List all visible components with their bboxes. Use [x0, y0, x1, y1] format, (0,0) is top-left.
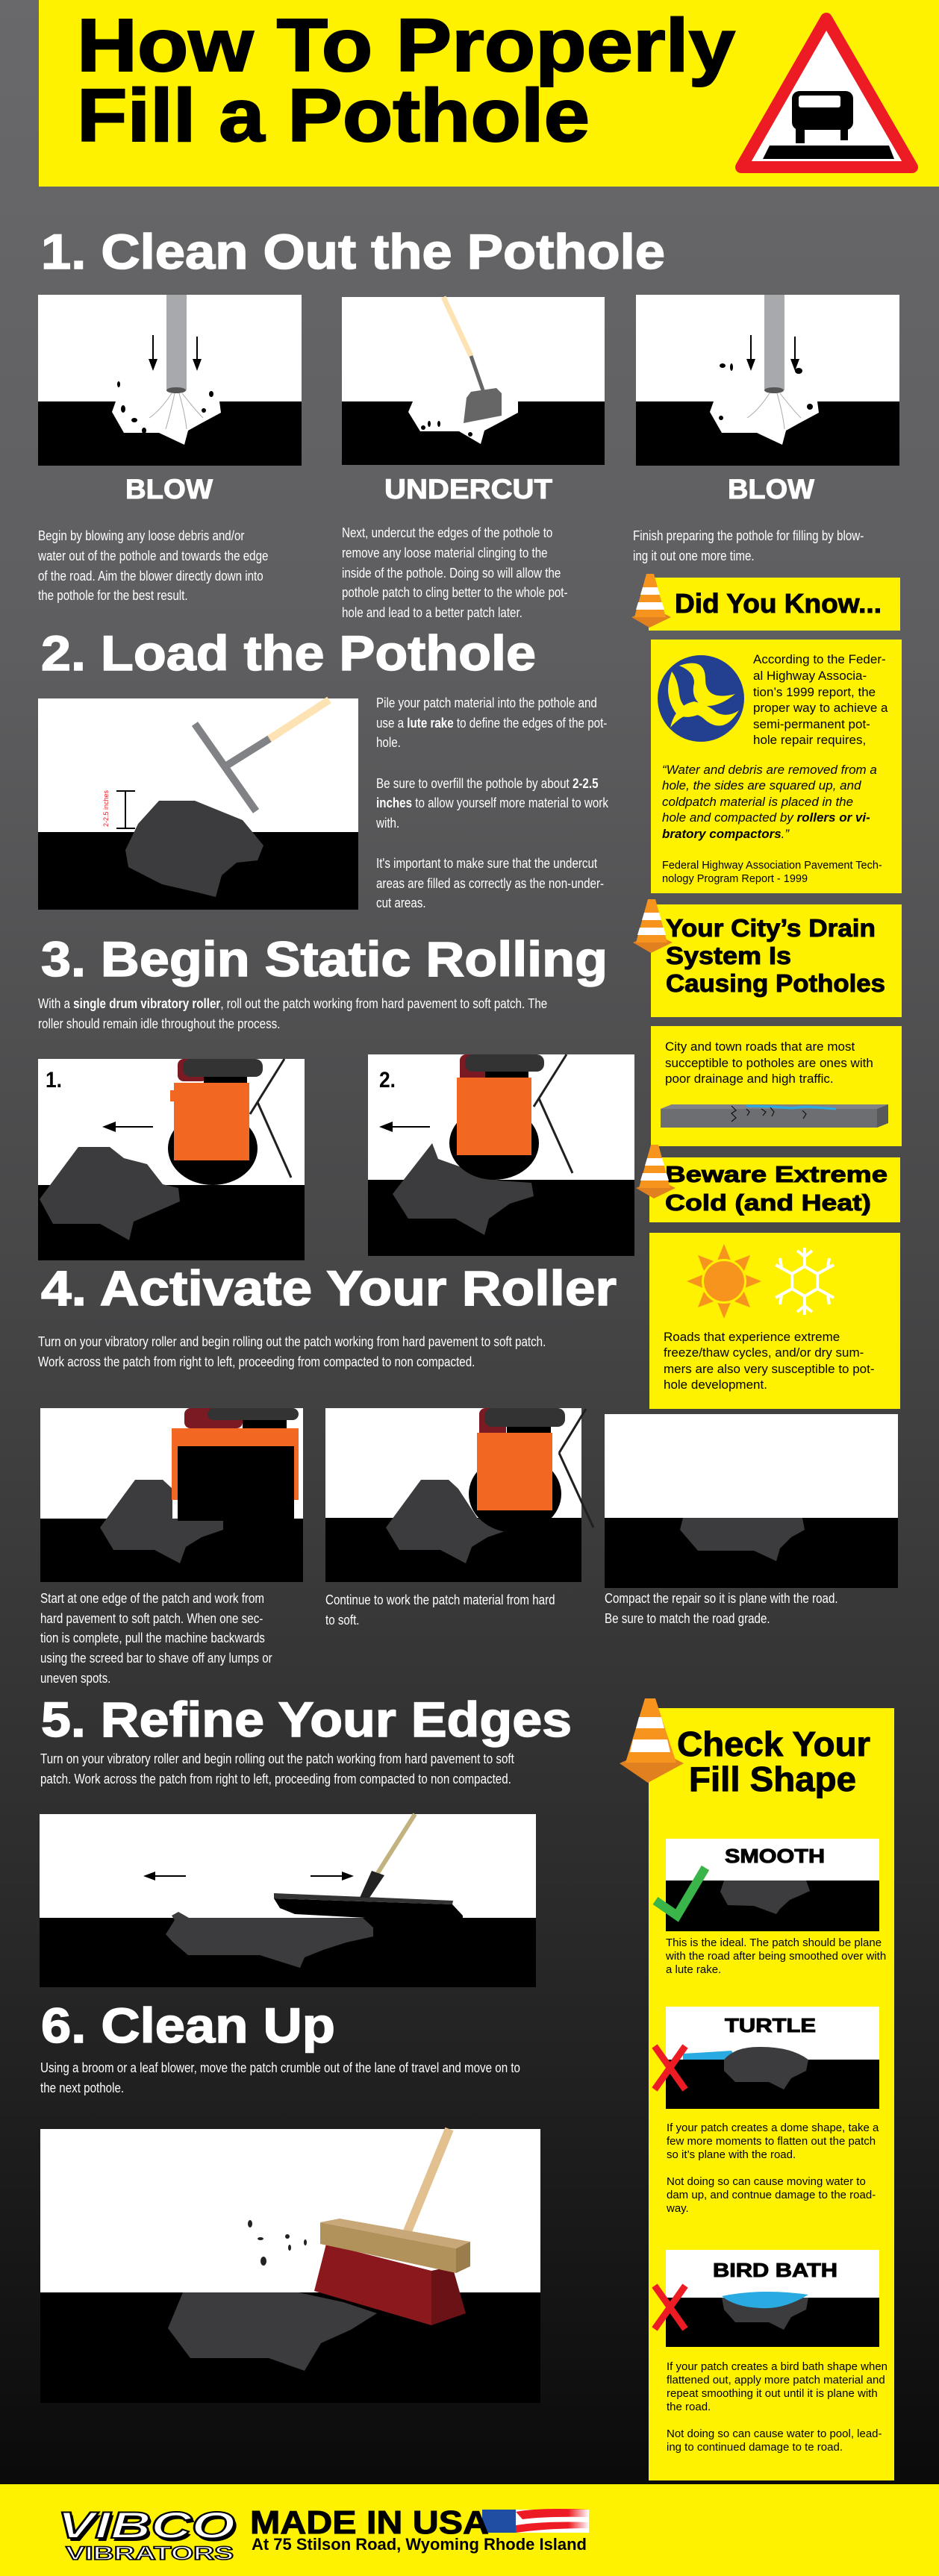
label: BLOW 2: BLOW: [728, 474, 814, 504]
footer: [0, 2484, 939, 2576]
callout: check your fill shape: Not doing so can cause moving water to: [667, 2175, 866, 2188]
callout: did you know: Did You Know...: [675, 588, 882, 619]
callout: check your fill shape: [649, 1708, 894, 2480]
title banner: [39, 0, 939, 187]
callout: check your fill shape: Not doing so can cause water to pool, lead-: [667, 2427, 882, 2440]
text: activate captions: tion is complete, pull the machine backwards: [40, 1631, 265, 1645]
annotation: 2-2.5 inches: 2-2.5 inches: [102, 790, 110, 827]
text: undercut: Next, undercut the edges of the pothole to: [342, 525, 552, 540]
panel: blow 2: [636, 295, 899, 466]
panel: smooth: SMOOTH: [725, 1845, 825, 1867]
text: load: hole.: [376, 735, 401, 750]
heading: 4: 4. Activate Your Roller: [41, 1260, 617, 1316]
callout: check your fill shape: the road.: [667, 2401, 711, 2413]
callout: FHWA: semi-permanent pot-: [753, 717, 870, 731]
text: activate captions: Start at one edge of the patch and work from: [40, 1591, 264, 1606]
panel: activate 1: [40, 1408, 303, 1582]
callout: FHWA: According to the Feder-: [753, 652, 886, 666]
text: blow 2: Finish preparing the pothole for filling by blow-: [633, 528, 864, 543]
panel: refine: [40, 1814, 536, 1987]
callout: weather: Roads that experience extreme: [664, 1330, 840, 1344]
callout: weather: [649, 1233, 900, 1409]
text: activate captions: to soft.: [325, 1613, 360, 1628]
text: load: with.: [375, 816, 399, 831]
panel: rolling 2: [368, 1054, 634, 1256]
panel: activate 3: [605, 1414, 898, 1588]
text: refine: Turn on your vibratory roller and begin rolling out the patch working from hard pavement to soft: [40, 1751, 514, 1766]
text: undercut: pothole patch to cling better to the whole pot-: [342, 585, 568, 600]
text: load: Be sure to overfill the pothole by about 2-2.5: [376, 776, 599, 791]
logo: VIBCO: [57, 2504, 237, 2564]
panel: turtle: TURTLE: [725, 2014, 816, 2036]
callout: weather: freeze/thaw cycles, and/or dry sum-: [664, 1345, 864, 1360]
title: [77, 4, 735, 157]
callout: drain text: succeptible to potholes are ones with: [665, 1056, 873, 1070]
panel: bird bath: [655, 2250, 879, 2347]
annotation: 2-2.5 inches: [102, 790, 135, 828]
icon: cone 1: [631, 574, 671, 628]
text: clean up: the next pothole.: [40, 2081, 124, 2095]
callout: did you know: [649, 578, 900, 631]
text: activate captions: Compact the repair so it is plane with the road.: [605, 1591, 838, 1606]
text: load: inches to allow yourself more material to work: [376, 795, 608, 810]
callout: check your fill shape: flattened out, apply more patch material and: [667, 2374, 885, 2386]
text: activate captions: uneven spots.: [40, 1671, 110, 1686]
title: Fill a Pothole: [77, 74, 590, 157]
panel: blow 1: [38, 295, 302, 466]
callout: check your fill shape: Check Your: [677, 1725, 870, 1763]
panel: activate 2: [325, 1408, 593, 1582]
callout: drain heading: Your City’s Drain: [666, 914, 876, 942]
text: refine: patch. Work across the patch from right to left, proceeding from compacted to non compacted.: [40, 1772, 511, 1786]
panel: rolling 2: 2.: [379, 1068, 396, 1092]
callout: beware heading: Cold (and Heat): [665, 1189, 871, 1216]
callout: weather: hole development.: [664, 1378, 767, 1392]
callout: beware heading: Beware Extreme: [665, 1161, 887, 1187]
callout: check your fill shape: This is the ideal. The patch should be plane: [666, 1936, 882, 1949]
callout: drain text: [651, 1026, 902, 1146]
text: static rolling: With a single drum vibratory roller, roll out the patch working from hard pavement to soft patch. The: [38, 996, 547, 1011]
heading: 3: 3. Begin Static Rolling: [41, 931, 608, 987]
panel: rolling 1: [38, 1059, 305, 1260]
text: blow 1: of the road. Aim the blower directly down into: [38, 569, 263, 584]
callout: FHWA: Federal Highway Association Pavement Tech-: [662, 860, 882, 872]
text: undercut: remove any loose material clinging to the: [342, 545, 548, 560]
icon: flag: [482, 2509, 589, 2533]
heading: 2: 2. Load the Pothole: [41, 625, 536, 681]
callout: FHWA: hole and compacted by rollers or vi-: [662, 810, 870, 825]
icon: warning sign: [741, 19, 912, 167]
panel: load: [38, 698, 358, 910]
callout: check your fill shape: so it’s plane with the road.: [667, 2148, 796, 2161]
text: blow 2: ing it out one more time.: [633, 548, 755, 563]
panel: bird bath: BIRD BATH: [713, 2259, 837, 2281]
text: blow 1: the pothole for the best result.: [38, 588, 188, 603]
text: blow 1: Begin by blowing any loose debris and/or: [38, 528, 245, 543]
text: activate captions: Continue to work the patch material from hard: [325, 1592, 555, 1607]
icon: cone 3: [636, 1145, 676, 1198]
callout: FHWA: hole repair requires,: [753, 733, 866, 747]
panel: clean up: [40, 2129, 540, 2403]
panel: smooth: [655, 1839, 879, 1931]
logo: VIBCO: VIBRATORS: [66, 2543, 234, 2564]
icon: cracked road slab: [661, 1104, 888, 1128]
icon: big cone: [620, 1698, 684, 1783]
callout: FHWA: coldpatch material is placed in the: [662, 795, 853, 809]
callout: check your fill shape: repeat smoothing it out until it is plane with: [667, 2387, 878, 2400]
callout: check your fill shape: with the road after being smoothed over with: [665, 1950, 886, 1963]
callout: check your fill shape: few more moments to flatten out the patch: [667, 2135, 876, 2148]
label: BLOW: BLOW: [125, 474, 213, 504]
text: activate captions: Be sure to match the road grade.: [605, 1611, 770, 1626]
text: clean up: Using a broom or a leaf blower, move the patch crumble out of the lane of travel and move on to: [40, 2060, 520, 2075]
callout: FHWA: hole, the sides are squared up, and: [662, 778, 861, 793]
panel: rolling 1: 1.: [46, 1068, 62, 1092]
text: load: cut areas.: [376, 895, 426, 910]
callout: drain heading: [651, 904, 902, 1017]
text: activate: Work across the patch from right to left, proceeding from compacted to non compacted.: [38, 1354, 475, 1369]
panel: undercut: [342, 297, 605, 465]
callout: beware heading: [649, 1157, 900, 1222]
text: load: areas are filled as correctly as the non-under-: [376, 876, 604, 891]
logo: VIBCO: VIBCO: [60, 2507, 237, 2549]
heading: 5: 5. Refine Your Edges: [41, 1692, 572, 1747]
callout: drain text: City and town roads that are most: [665, 1040, 855, 1054]
icon: cone 2: [633, 899, 673, 953]
text: activate captions: using the screed bar to shave off any lumps or: [40, 1651, 272, 1666]
callout: check your fill shape: If your patch creates a dome shape, take a: [667, 2122, 879, 2134]
icon: snowflake: [776, 1248, 834, 1315]
heading: 1: 1. Clean Out the Pothole: [41, 224, 665, 279]
callout: check your fill shape: Fill Shape: [689, 1760, 856, 1798]
text: activate: Turn on your vibratory roller and begin rolling out the patch working from hard pavement to soft patch.: [38, 1334, 546, 1349]
callout: check your fill shape: If your patch creates a bird bath shape when: [667, 2360, 887, 2373]
text: activate captions: hard pavement to soft patch. When one sec-: [40, 1611, 263, 1626]
callout: FHWA: nology Program Report - 1999: [662, 873, 808, 885]
callout: weather: mers are also very susceptible to pot-: [664, 1362, 875, 1376]
callout: FHWA: [651, 640, 902, 893]
callout: drain heading: Causing Potholes: [666, 969, 885, 997]
callout: drain text: poor drainage and high traffic.: [665, 1072, 834, 1086]
heading: 6: 6. Clean Up: [41, 1998, 335, 2053]
label: UNDERCUT: UNDERCUT: [384, 474, 552, 504]
text: load: Pile your patch material into the pothole and: [376, 695, 597, 710]
callout: check your fill shape: dam up, and contnue damage to the road-: [667, 2189, 876, 2201]
callout: check your fill shape: a lute rake.: [666, 1963, 721, 1976]
panel: turtle: [655, 2007, 879, 2109]
text: undercut: inside of the pothole. Doing so will allow the: [342, 566, 561, 581]
text: address: At 75 Stilson Road, Wyoming Rhode Island: [252, 2535, 587, 2554]
text: load: use a lute rake to define the edges of the pot-: [376, 716, 607, 731]
callout: FHWA: al Highway Associa-: [753, 669, 867, 683]
callout: FHWA: tion’s 1999 report, the: [753, 685, 876, 699]
callout: check your fill shape: way.: [666, 2202, 689, 2215]
icon: sun: [687, 1244, 761, 1319]
callout: drain heading: System Is: [666, 942, 791, 969]
icon: FHWA logo: [658, 655, 744, 742]
text: undercut: hole and lead to a better patch later.: [342, 605, 522, 620]
text: blow 1: water out of the pothole and towards the edge: [37, 548, 268, 563]
callout: check your fill shape: ing to continued damage to te road.: [667, 2441, 843, 2454]
title: How To Properly: [77, 4, 735, 87]
callout: FHWA: bratory compactors.”: [662, 827, 789, 841]
text: made in usa: MADE IN USA: [250, 2504, 489, 2541]
text: static rolling: roller should remain idle throughout the process.: [38, 1016, 280, 1031]
callout: FHWA: proper way to achieve a: [753, 701, 888, 715]
logo: VIBCO: VIBCO: [57, 2504, 235, 2546]
text: load: It's important to make sure that the undercut: [376, 856, 597, 871]
callout: FHWA: “Water and debris are removed from a: [662, 763, 877, 777]
text: activate captions: [40, 1591, 838, 1686]
